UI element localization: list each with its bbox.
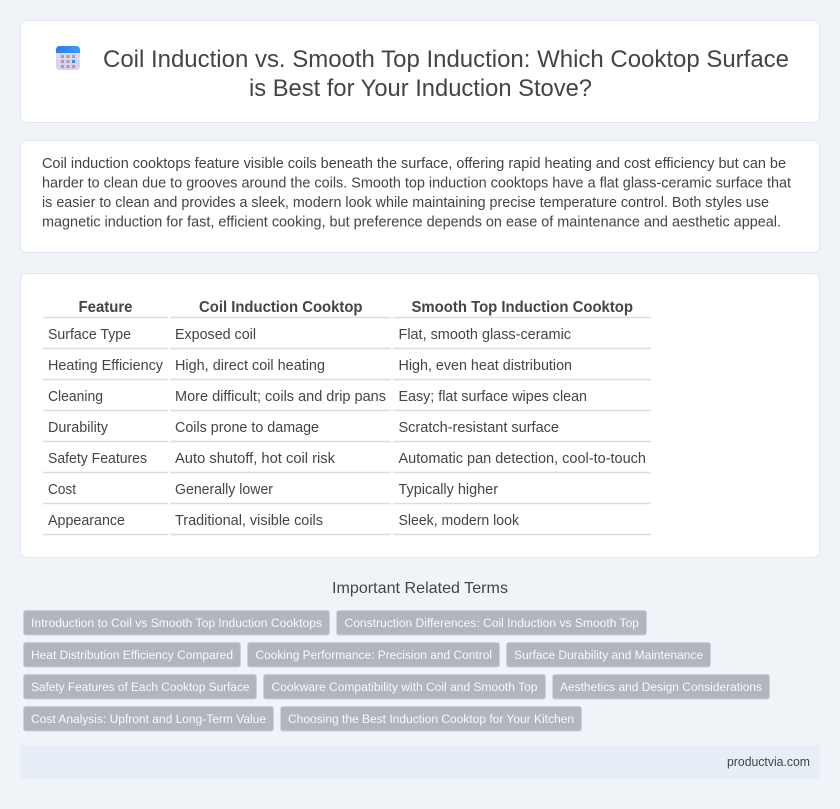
table header: Feature (78, 299, 133, 316)
table row: surface type: Flat, smooth glass-ceramic (398, 327, 571, 343)
table row: durability (48, 420, 559, 436)
table row: safety features (48, 451, 646, 467)
text block: intro paragraph (42, 156, 791, 230)
table row: cost: Typically higher (398, 482, 498, 498)
table row: cleaning: Easy; flat surface wipes clean (398, 389, 587, 405)
tag (506, 642, 710, 667)
footer (20, 745, 820, 779)
table row: cleaning: Cleaning (48, 389, 103, 405)
tag: Safety Features of Each Cooktop Surface (31, 680, 250, 694)
table row: surface type: Surface Type (48, 327, 131, 343)
table row: appearance: Traditional, visible coils (175, 513, 323, 529)
table row: appearance: Sleek, modern look (398, 513, 520, 529)
tag: Cost Analysis: Upfront and Long-Term Value (31, 712, 266, 726)
text block: intro paragraph: magnetic induction for fast, efficient cooking, but preference depends on ease of maintenance and aesthetic appeal. (42, 214, 781, 230)
icon: calendar grid (56, 46, 80, 70)
table row: cost (48, 482, 498, 498)
table row: surface type: Exposed coil (175, 327, 256, 343)
table row: cost: Generally lower (175, 482, 273, 498)
panel: introduction (20, 140, 820, 252)
table header (78, 299, 633, 316)
table row: safety features: Safety Features (48, 451, 147, 467)
table row: appearance (48, 513, 520, 529)
table row: durability: Durability (48, 420, 109, 436)
table row: cleaning: More difficult; coils and drip pans (175, 389, 386, 405)
table header: Coil Induction Cooktop (199, 299, 362, 316)
tag cloud: related terms (24, 610, 770, 731)
tag (336, 610, 646, 635)
table row: heating efficiency: High, even heat distribution (398, 358, 572, 374)
tag (24, 642, 240, 667)
tag: Cooking Performance: Precision and Control (256, 648, 492, 662)
table row: appearance: Appearance (48, 513, 125, 529)
panel: header (20, 20, 820, 122)
table row: durability: Coils prone to damage (175, 420, 319, 436)
tag: Construction Differences: Coil Induction vs Smooth Top (344, 616, 639, 630)
table row: surface type (48, 327, 571, 343)
tag (552, 674, 770, 699)
tag: Introduction to Coil vs Smooth Top Induction Cooktops (31, 616, 322, 630)
table row: durability: Scratch-resistant surface (398, 420, 559, 436)
text block: intro paragraph: is easier to clean and provides a sleek, modern look while maintaining precise temperature control. Both styles use (42, 195, 769, 211)
tag (24, 706, 274, 731)
table row: cleaning (48, 389, 587, 405)
text block: intro paragraph: harder to clean due to grooves around the coils. Smooth top induction cooktops have a flat glass-ceramic surface that (42, 176, 791, 192)
tag: Cookware Compatibility with Coil and Smooth Top (272, 680, 538, 694)
title: Coil Induction vs. Smooth Top Induction: Which Cooktop Surface (103, 46, 789, 73)
table row: safety features: Auto shutoff, hot coil risk (175, 451, 336, 467)
tag: Surface Durability and Maintenance (514, 648, 703, 662)
table row: heating efficiency: High, direct coil heating (175, 358, 325, 374)
tag (24, 674, 256, 699)
table row: heating efficiency (48, 358, 572, 374)
heading: important related terms: Important Related Terms (332, 580, 508, 597)
tag: Heat Distribution Efficiency Compared (31, 648, 233, 662)
tag (248, 642, 500, 667)
tag (280, 706, 582, 731)
title (103, 46, 789, 102)
table row: cost: Cost (48, 482, 76, 498)
footer: productvia.com (727, 755, 810, 769)
title: is Best for Your Induction Stove? (249, 75, 592, 102)
table row: safety features: Automatic pan detection, cool-to-touch (398, 451, 646, 467)
tag (24, 610, 330, 635)
table row: heating efficiency: Heating Efficiency (48, 358, 164, 374)
tag: Choosing the Best Induction Cooktop for Your Kitchen (288, 712, 574, 726)
text block: intro paragraph: Coil induction cooktops feature visible coils beneath the surface, offering rapid heating and cost efficiency but can be (42, 156, 786, 172)
panel: comparison table (20, 274, 820, 558)
tag: Aesthetics and Design Considerations (560, 680, 762, 694)
table header: Smooth Top Induction Cooktop (412, 299, 633, 316)
tag (264, 674, 546, 699)
